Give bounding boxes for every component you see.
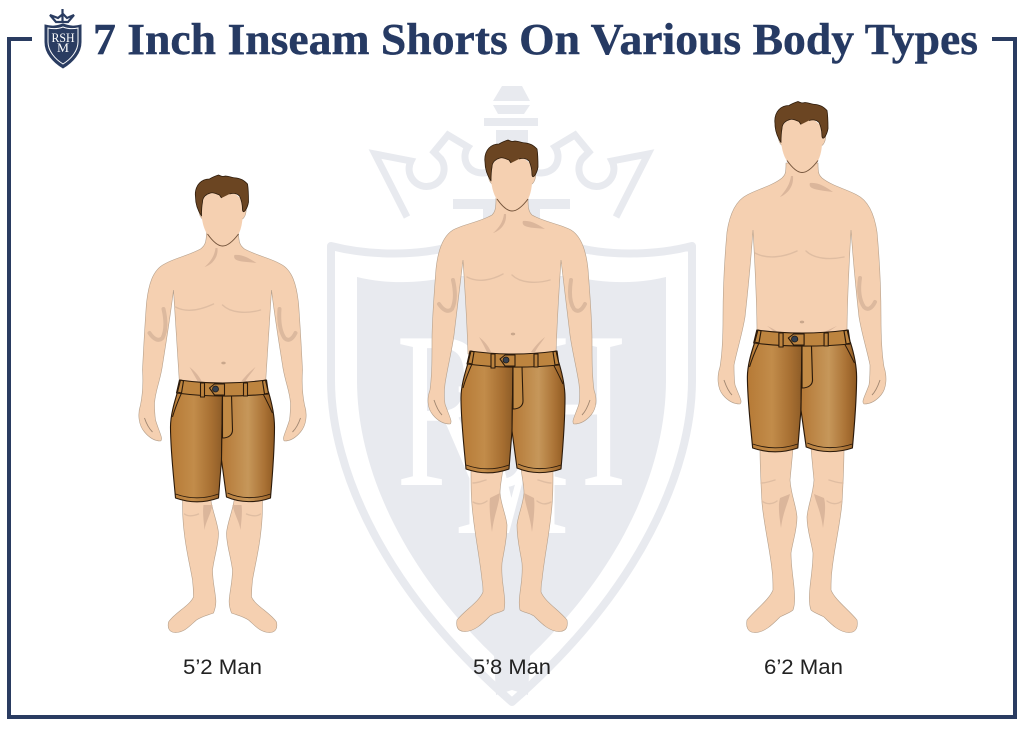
logo: monogram: M bbox=[57, 40, 69, 55]
shorts bbox=[461, 351, 565, 473]
legs bbox=[168, 498, 277, 633]
watermark: monogram letters bbox=[396, 286, 626, 582]
watermark: monogram letters: R bbox=[396, 286, 496, 534]
watermark: RSM crest bbox=[331, 86, 692, 702]
head bbox=[775, 102, 828, 172]
label: 5'2 man: 5’2 Man bbox=[183, 655, 262, 679]
logo: monogram bbox=[52, 30, 74, 55]
watermark: shield inner field bbox=[357, 276, 666, 695]
body shading bbox=[724, 176, 880, 395]
logo: shield bbox=[45, 24, 81, 68]
logo: crown bbox=[50, 9, 74, 22]
watermark: monogram letters: S bbox=[470, 286, 540, 534]
head bbox=[195, 175, 248, 246]
legs bbox=[457, 468, 567, 632]
torso and arms bbox=[139, 232, 306, 441]
logo bbox=[45, 9, 81, 68]
watermark: crown finial bbox=[453, 86, 570, 221]
watermark: monogram letters: M bbox=[455, 334, 569, 582]
label: 6'2 man: 6’2 Man bbox=[764, 655, 843, 679]
watermark: monogram letters: H bbox=[525, 286, 626, 534]
torso and arms bbox=[718, 163, 886, 404]
watermark: crown outline bbox=[375, 135, 648, 217]
label: 5'8 man: 5’8 Man bbox=[473, 655, 551, 679]
watermark: shield outer band bbox=[331, 246, 692, 702]
shorts bbox=[170, 380, 274, 502]
shorts bbox=[747, 330, 857, 452]
figure: 5'8 man bbox=[428, 140, 596, 632]
title: 7 Inch Inseam Shorts On Various Body Types bbox=[93, 15, 978, 64]
legs bbox=[747, 448, 857, 633]
body shading bbox=[434, 214, 590, 415]
body shading bbox=[144, 248, 300, 432]
figure: 5'2 man bbox=[139, 175, 306, 633]
logo: monogram: RSH bbox=[52, 30, 74, 45]
torso and arms bbox=[428, 198, 596, 424]
head bbox=[485, 140, 538, 211]
figure: 6'2 man bbox=[718, 102, 886, 633]
